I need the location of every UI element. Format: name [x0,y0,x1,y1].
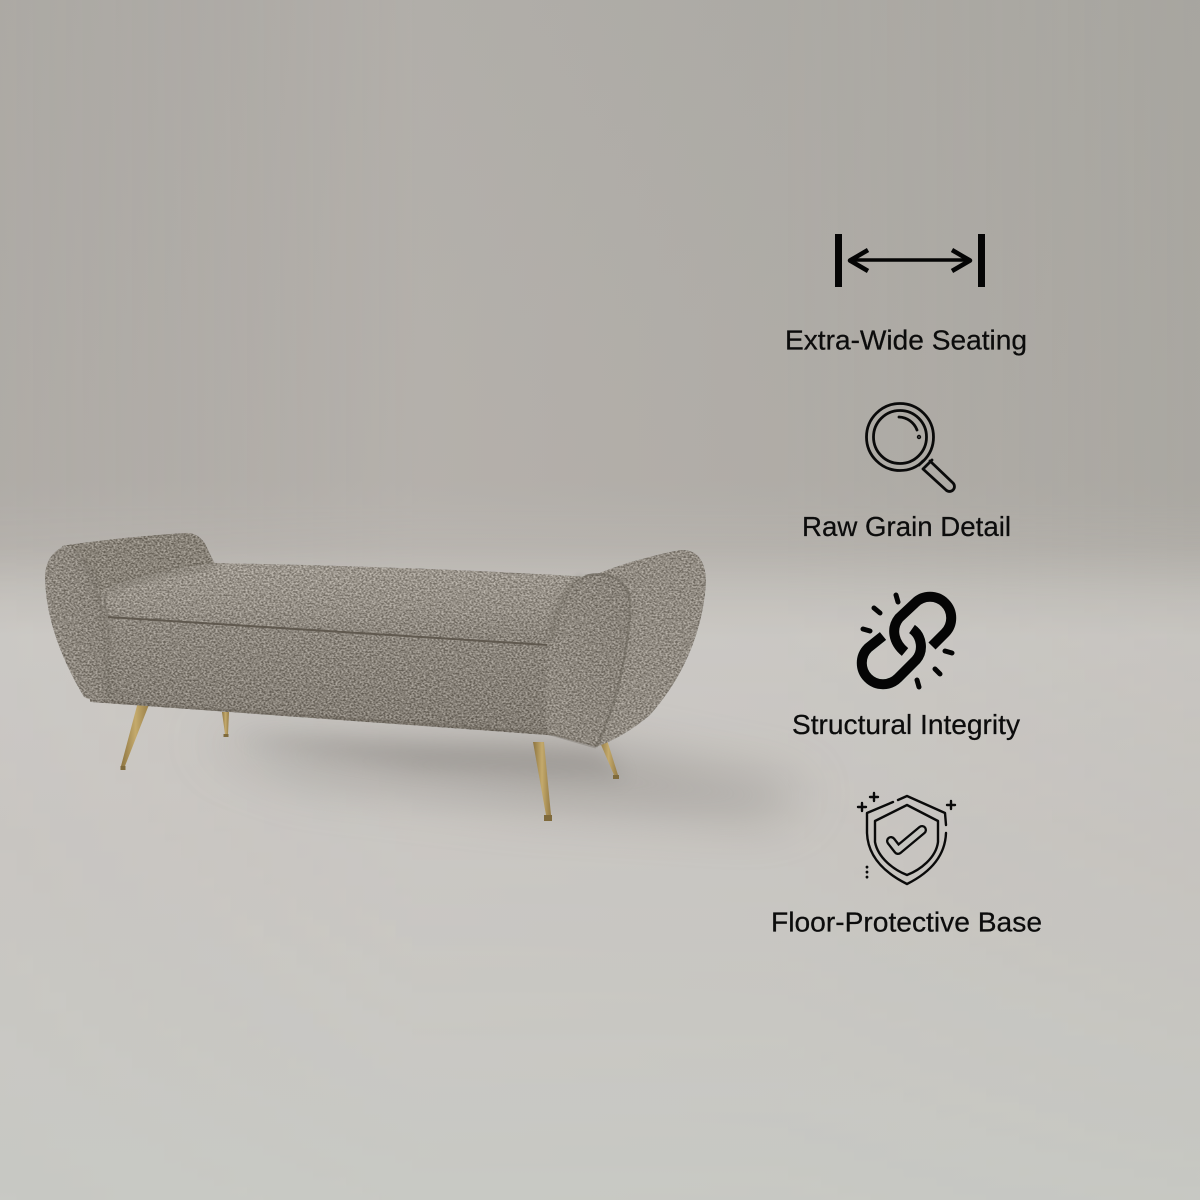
bench product illustration [45,533,706,821]
feature: structural integrity [792,595,1020,740]
seat seam [108,617,547,645]
bench legs [120,702,619,821]
left arm front panel [45,545,108,703]
icon: width arrow [838,234,982,287]
right arm front panel [546,573,630,747]
feature: floor-protective base [771,793,1042,938]
icon: shield with check [858,793,955,884]
icon: magnifying glass [866,404,954,491]
icon: chain link [862,595,952,687]
feature: extra-wide seating [785,234,1027,356]
right arm rear [575,550,706,747]
label: raw grain detail: Raw Grain Detail [802,511,1011,542]
floor shadow under bench [200,738,810,815]
feature: raw grain detail [802,404,1011,542]
label: extra-wide seating: Extra-Wide Seating [785,324,1027,356]
storage base [90,612,560,736]
left arm rear roll [62,533,216,600]
label: structural integrity: Structural Integrity [792,709,1020,740]
bench upholstery [45,533,706,747]
upholstery shading [76,553,630,747]
seat cushion [90,563,590,646]
label: floor-protective base: Floor-Protective Base [771,906,1042,938]
background: studio wall and floor [0,0,1200,592]
product infographic [0,0,1200,932]
